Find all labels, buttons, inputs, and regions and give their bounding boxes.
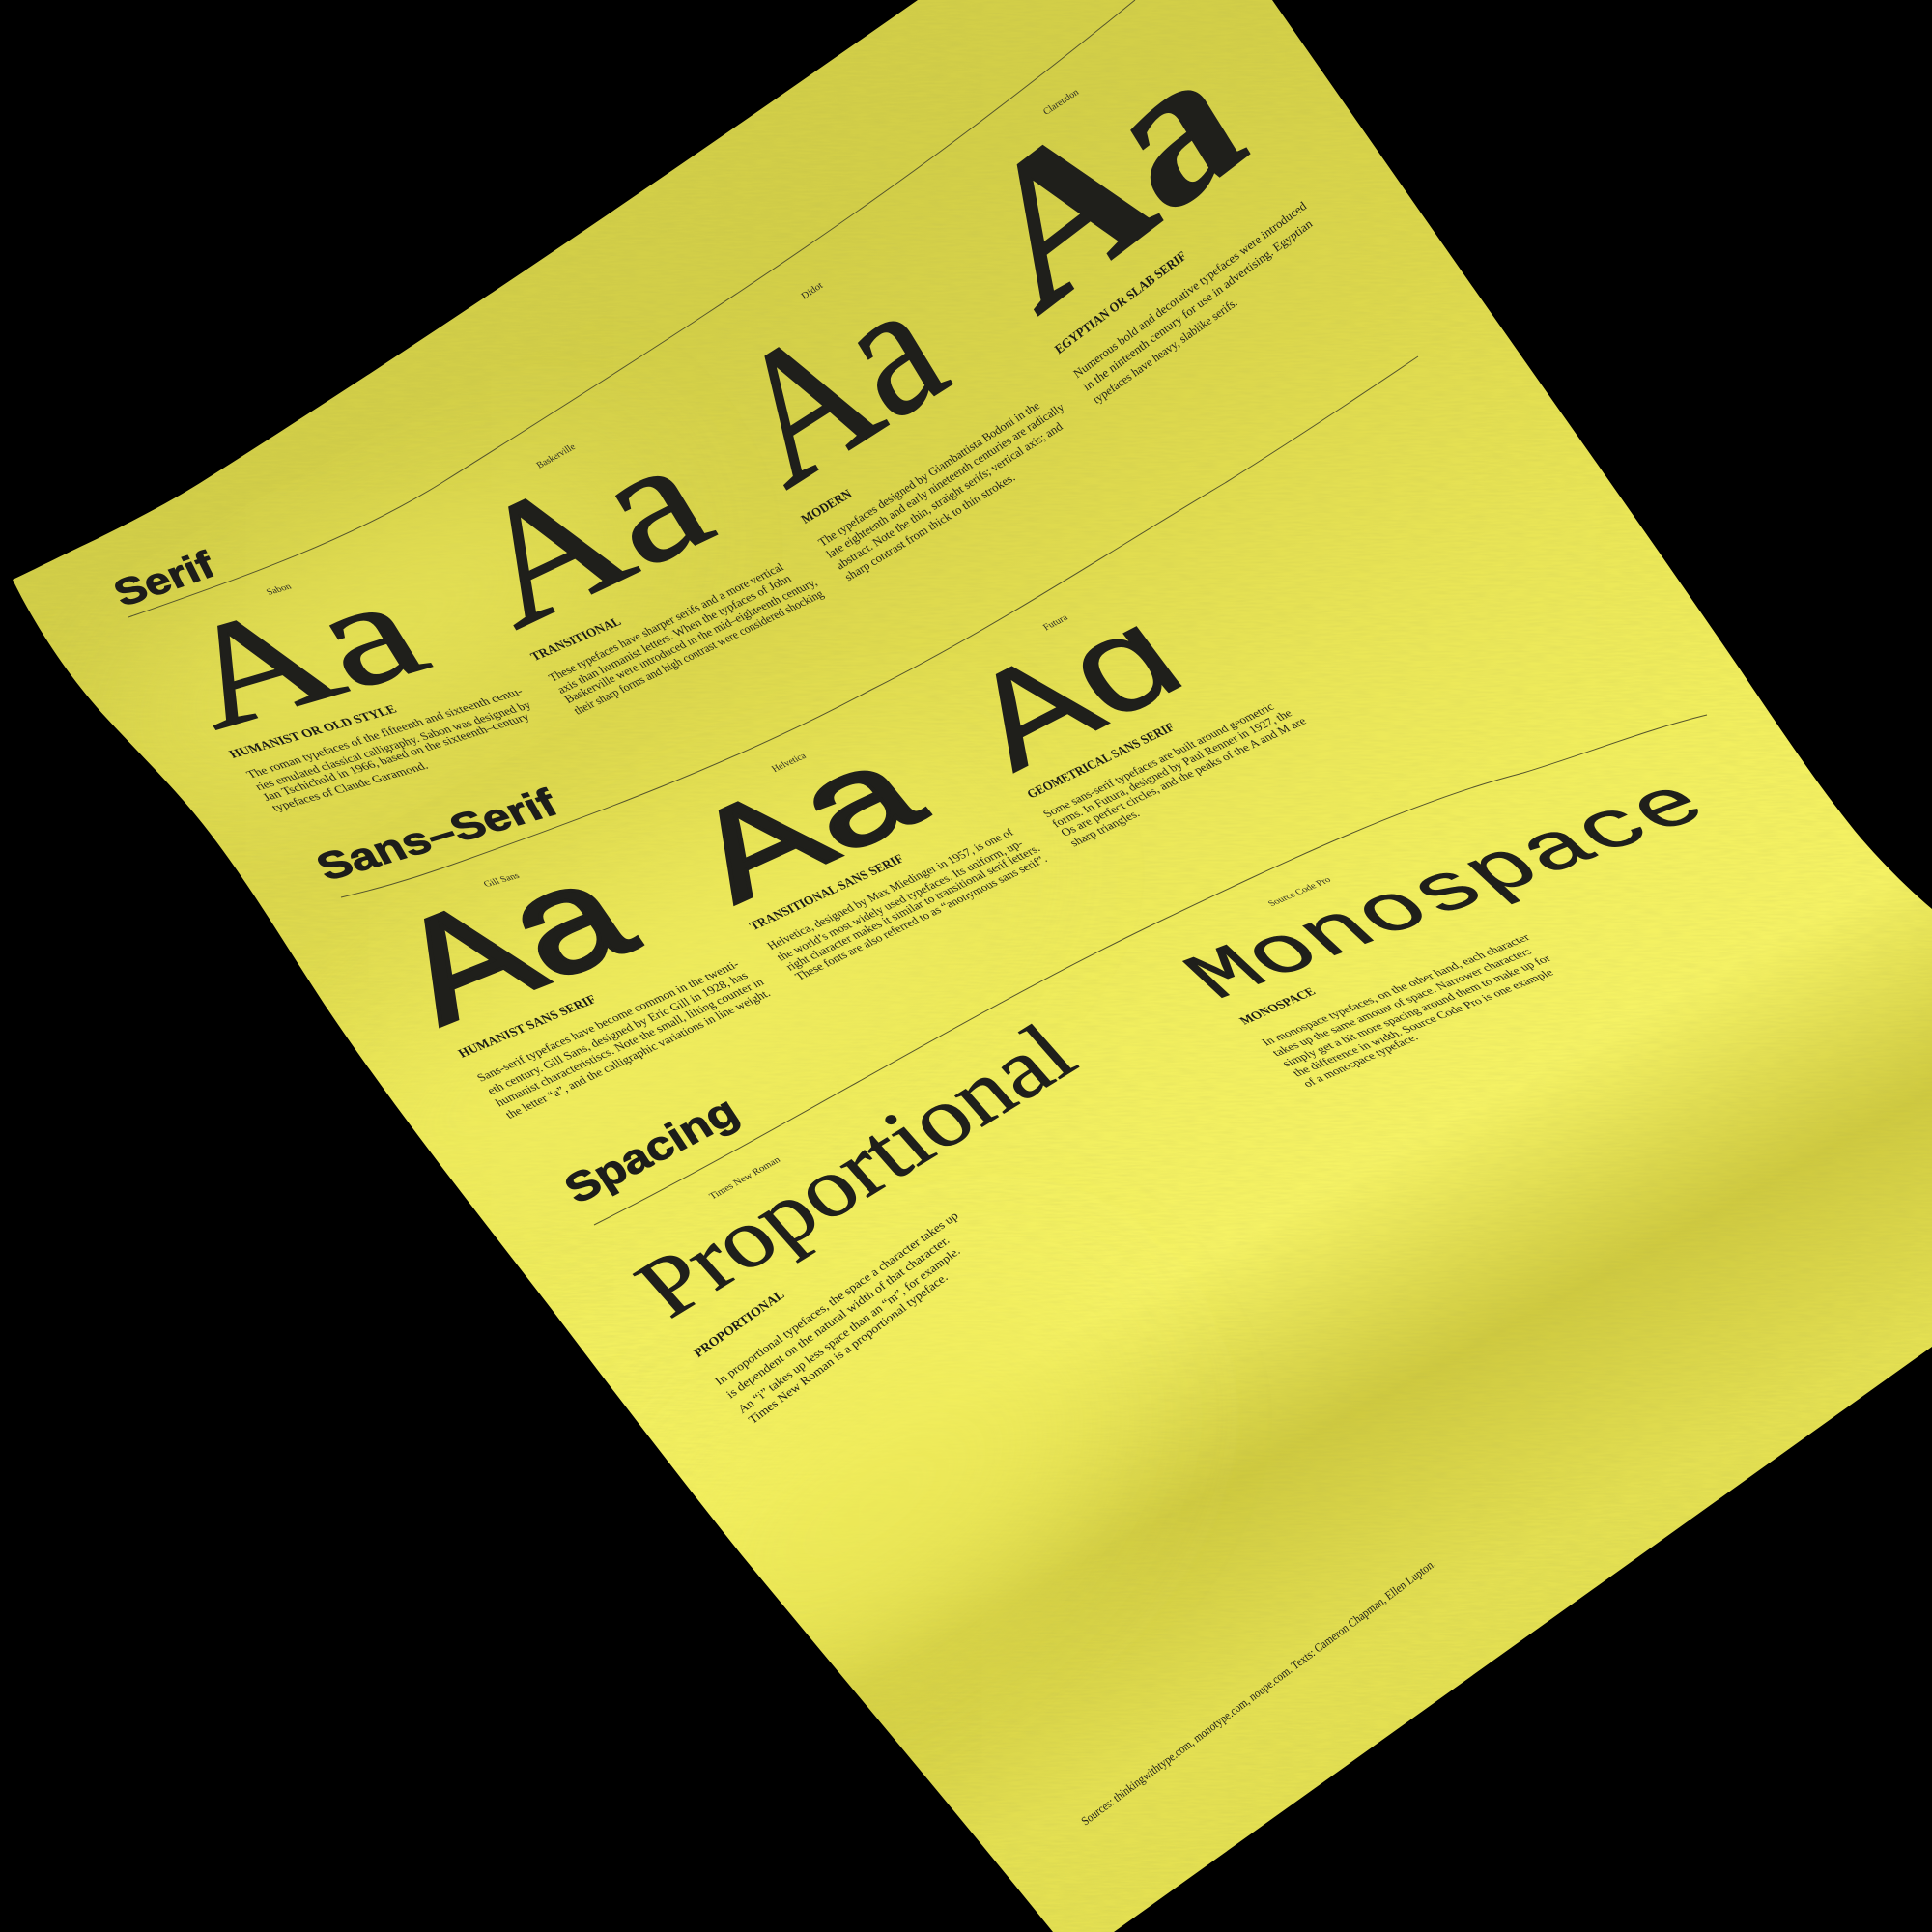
specimen: Didot Aa: Aa — [698, 242, 976, 526]
heading: Spacing: Spacing — [556, 1088, 747, 1212]
body text: the letter “a”, and the calligraphic variations in line weight. — [502, 986, 773, 1122]
body text: right character makes it similar to transitional serif letters. — [783, 842, 1043, 973]
font name: Gill Sans: Gill Sans — [482, 871, 522, 890]
body text: is dependent on the natural width of that character. — [724, 1234, 952, 1401]
specimen: Clarendon Aa: Aa — [942, 0, 1276, 355]
panel: humanist or old style — [141, 549, 534, 813]
panel: humanist sans serif — [360, 830, 773, 1122]
body text: Some sans-serif typefaces are built around geometric — [1040, 700, 1277, 820]
body text — [243, 685, 534, 813]
subheading: TRANSITIONAL — [527, 614, 624, 664]
panel: geometrical sans serif — [937, 580, 1310, 849]
subheading: EGYPTIAN OR SLAB SERIF — [1052, 248, 1189, 356]
heading: Sans-Serif: Sans–Serif — [308, 781, 566, 889]
body text: typefaces have heavy, slablike serifs. — [1091, 296, 1239, 407]
body text: Numerous bold and decorative typefaces were introduced — [1071, 198, 1310, 381]
heading: Serif: Serif — [107, 544, 222, 614]
body text: the difference in width. Source Code Pro is one example — [1290, 966, 1557, 1079]
rule: spacing section — [594, 715, 1707, 1225]
subheading: PROPORTIONAL — [691, 1287, 787, 1360]
body text: Helvetica, designed by Max Miedinger in 1957, is one of — [764, 826, 1017, 952]
subheading: GEOMETRICAL SANS SERIF — [1024, 720, 1178, 801]
body text: These fonts are also referred to as “anonymous sans serif”. — [792, 853, 1050, 982]
body text: the world’s most widely used typefaces. Its uniform, up- — [774, 838, 1026, 963]
font name: Baskerville: Baskerville — [535, 441, 578, 470]
body text: The typefaces designed by Giambattista Bodoni in the — [815, 399, 1042, 549]
sources credit: Sources: thinkingwithtype.com, monotype.com, noupe.com. Texts: Cameron Chapman, Ellen Lupton. — [1079, 1556, 1438, 1828]
body text: late eighteenth and early nineteenth centuries are radically — [824, 400, 1067, 561]
body text: ries emulated classical calligraphy. Sabon was designed by — [252, 698, 534, 793]
specimen: Sabon Aa: Aa — [141, 549, 453, 758]
body text: An “i” takes up less space than an “m”, for example. — [735, 1244, 963, 1416]
body text: axis than humanist letters. When the typfaces of John — [554, 572, 794, 696]
font name: Times New Roman: Times New Roman — [707, 1155, 782, 1202]
panel: egyptian or slab serif — [942, 0, 1316, 407]
body text: abstract. Note the thin, straight serifs; vertical axis; and — [834, 419, 1065, 572]
body text: humanist characteristiscs. Note the small, lilting counter in — [493, 975, 767, 1109]
body text: sharp contrast from thick to thin strokes. — [842, 470, 1018, 583]
body text: The roman typefaces of the fifteenth and sixteenth centu- — [243, 685, 526, 781]
body text: their sharp forms and high contrast were considered shocking — [571, 587, 827, 717]
body text: simply get a bit more spacing around them to make up for — [1279, 952, 1554, 1069]
subheading: MONOSPACE — [1236, 985, 1319, 1027]
body text: Os are perfect circles, and the peaks of the A and M are — [1058, 715, 1310, 838]
panel: proportional — [617, 1007, 1094, 1427]
font name: Didot: Didot — [800, 280, 825, 301]
body text: In proportional typefaces, the space a character takes up — [712, 1209, 961, 1388]
body text: takes up the same amount of space. Narrower characters — [1269, 946, 1535, 1059]
font name: Helvetica: Helvetica — [770, 751, 809, 775]
body text: forms. In Futura, designed by Paul Renner in 1927, the — [1049, 706, 1295, 830]
specimen: Proportional: Proportional — [617, 1007, 1094, 1335]
body text: Baskerville were introduced in the mid–eighteenth century, — [562, 576, 820, 706]
specimen: Futura Aa: Aɑ — [937, 580, 1208, 797]
specimen: Baskerville Aa: Aa — [435, 402, 739, 663]
panel: transitional — [435, 402, 827, 717]
body text: In monospace typefaces, on the other hand, each character — [1259, 931, 1533, 1048]
panel: transitional sans serif — [658, 720, 1050, 982]
body text: in the ninteenth century for use in advertising. Egyptian — [1081, 216, 1316, 393]
font name: Futura: Futura — [1041, 612, 1070, 633]
body text: eth century. Gill Sans, designed by Eric Gill in 1928, has — [484, 969, 751, 1097]
subheading: HUMANIST SANS SERIF — [455, 992, 599, 1060]
specimen: Gill Sans Aa: Aa — [360, 830, 661, 1053]
body text: sharp triangles. — [1067, 808, 1143, 849]
body text: Jan Tschichold in 1966, based on the sixteenth–century — [260, 710, 533, 804]
font name: Sabon: Sabon — [265, 582, 294, 597]
panel: modern — [698, 242, 1067, 583]
rule: serif section — [128, 0, 1135, 617]
specimen: Monospace: Monospace — [1168, 767, 1729, 1017]
rule: sans-serif section — [341, 356, 1418, 897]
body text: of a monospace typeface. — [1300, 1032, 1421, 1090]
panel: monospace — [1168, 767, 1729, 1090]
subheading: MODERN — [798, 486, 855, 526]
specimen: Helvetica Aa: Aa — [658, 720, 950, 927]
subheading: HUMANIST OR OLD STYLE — [226, 702, 399, 760]
body text: typefaces of Claude Garamond. — [269, 759, 431, 813]
subheading: TRANSITIONAL SANS SERIF — [747, 851, 907, 933]
font name: Source Code Pro: Source Code Pro — [1266, 875, 1334, 909]
font name: Clarendon: Clarendon — [1041, 87, 1081, 118]
body text — [1259, 931, 1557, 1090]
body text — [712, 1209, 963, 1427]
body text: Times New Roman is a proportional typeface. — [746, 1270, 951, 1427]
body text: Sans-serif typefaces have become common in the twenti- — [474, 957, 742, 1084]
body text: These typefaces have sharper serifs and a more vertical — [546, 560, 786, 684]
